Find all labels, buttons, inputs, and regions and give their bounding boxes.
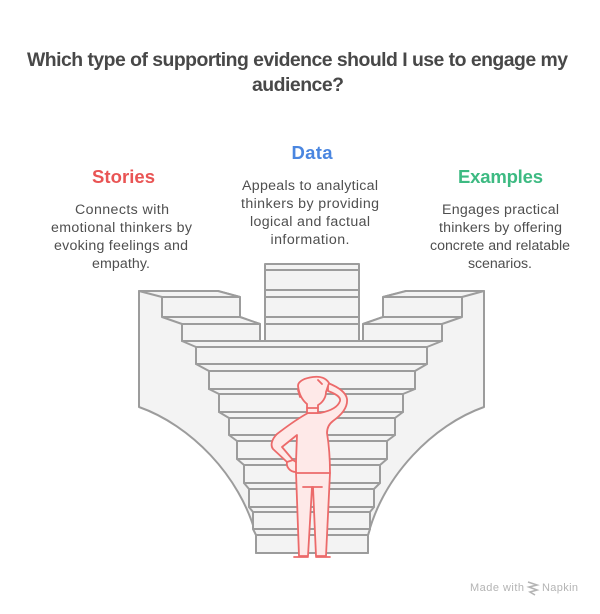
person details <box>287 380 330 557</box>
title: audience? <box>252 74 344 96</box>
text block: Examples: Examples <box>458 166 543 187</box>
person scratching head <box>272 377 347 557</box>
watermark: Made with Napkin: Made with <box>470 582 524 594</box>
text block: Stories: Stories <box>92 166 155 187</box>
person head <box>298 377 329 413</box>
text block: Data: Appeals to analytical <box>242 178 378 194</box>
text block: Data: information. <box>270 232 350 248</box>
icon: Napkin logo <box>528 582 537 595</box>
text block: Data: logical and factual <box>250 214 370 230</box>
watermark: Made with Napkin: Napkin <box>542 582 578 594</box>
person body with arms and legs <box>272 383 347 556</box>
shared steps descending <box>182 341 442 553</box>
text block: Stories: emotional thinkers by <box>51 220 193 236</box>
staircase funnel diagram <box>139 264 484 553</box>
text block: Examples: concrete and relatable <box>430 238 570 254</box>
center column: Data steps <box>265 264 359 341</box>
text block: Data: thinkers by providing <box>241 196 379 212</box>
title <box>27 49 568 96</box>
text block: Stories <box>51 166 193 272</box>
text block: Examples: scenarios. <box>468 256 532 272</box>
text block: Stories: evoking feelings and <box>54 238 188 254</box>
left upper steps: Stories <box>139 291 260 341</box>
title: Which type of supporting evidence should I use to engage my <box>27 49 568 71</box>
text block: Data <box>241 142 379 248</box>
text block: Examples <box>430 166 570 272</box>
text block: Data: Data <box>292 142 333 163</box>
watermark: Made with Napkin <box>470 582 578 595</box>
text block: Stories: Connects with <box>75 202 169 218</box>
text block: Examples: thinkers by offering <box>439 220 562 236</box>
right upper steps: Examples <box>363 291 484 341</box>
outer funnel body <box>139 291 484 553</box>
text block: Examples: Engages practical <box>442 202 559 218</box>
text block: Stories: empathy. <box>92 256 150 272</box>
